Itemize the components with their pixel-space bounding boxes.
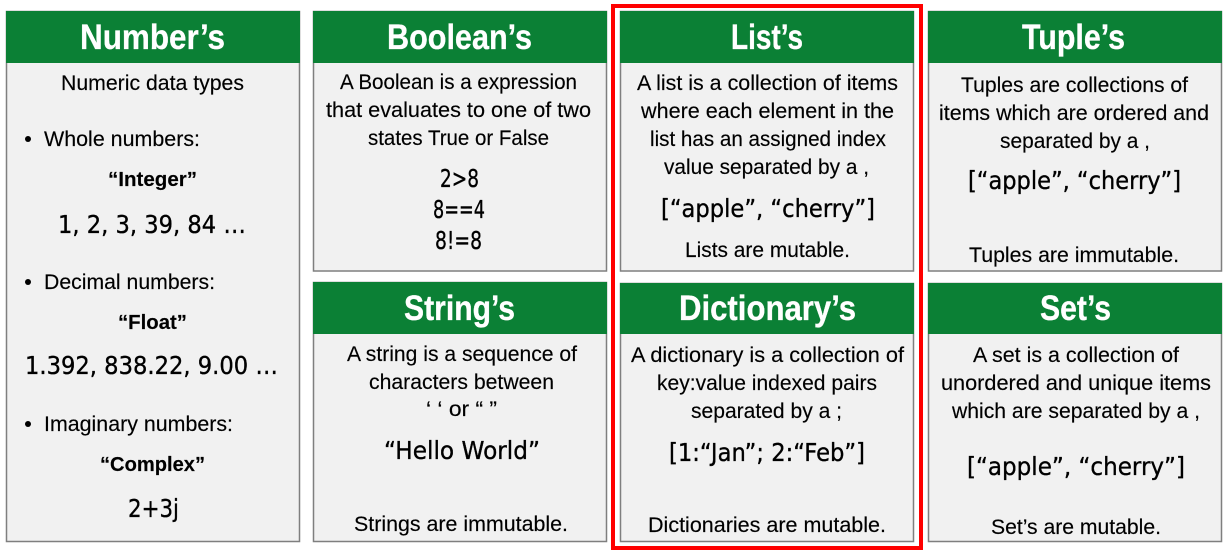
examples: boolean expressions: 8!=8 [435, 226, 482, 255]
panel: Tuples [928, 11, 1222, 271]
panel: Sets [928, 283, 1222, 542]
heading: Lists: List’s [731, 18, 803, 57]
examples: boolean expressions: 2>8 [440, 164, 479, 193]
example: set: [“apple”, “cherry”] [967, 452, 1185, 481]
panel: Dictionaries [620, 283, 914, 542]
note: sets mutable: Set’s are mutable. [991, 516, 1161, 539]
examples: boolean expressions [433, 164, 485, 255]
text: string description [347, 343, 577, 421]
panel: Strings [313, 282, 607, 542]
label: float: “Float” [118, 312, 187, 334]
text: tuple description: items which are ordered and [939, 102, 1209, 125]
label: complex: “Complex” [100, 454, 205, 476]
text: boolean description [326, 71, 591, 150]
text: numeric data types: Numeric data types [61, 72, 244, 95]
text: set description [941, 344, 1211, 423]
panel: Booleans [313, 11, 607, 271]
bullet: imaginary numbers: Imaginary numbers: [44, 413, 233, 436]
text: tuple description: separated by a , [1000, 130, 1150, 153]
note: lists mutable: Lists are mutable. [685, 239, 850, 262]
heading: Tuples: Tuple’s [1022, 18, 1125, 57]
text: string description: characters between [369, 371, 554, 394]
example: complex: 2+3j [128, 494, 179, 523]
text: list description: where each element in the [640, 100, 894, 123]
note: dictionaries mutable: Dictionaries are mutable. [648, 514, 886, 537]
example: dictionary: [1:“Jan”; 2:“Feb”] [669, 438, 865, 467]
text: list description [637, 72, 898, 179]
example: tuple: [“apple”, “cherry”] [968, 166, 1181, 195]
bullet: decimal numbers: Decimal numbers: [44, 271, 215, 294]
label: integer: “Integer” [108, 169, 197, 191]
bullet: whole numbers: Whole numbers: [44, 128, 200, 151]
text: tuple description: Tuples are collections of [961, 74, 1188, 97]
text: boolean description: that evaluates to one of two [326, 99, 591, 122]
text: string description: A string is a sequence of [347, 343, 577, 366]
text: boolean description: states True or False [368, 127, 549, 150]
text: boolean description: A Boolean is a expression [340, 71, 577, 94]
heading: Booleans: Boolean’s [387, 18, 532, 57]
example: integers: 1, 2, 3, 39, 84 … [58, 210, 246, 239]
text: list description: value separated by a , [664, 156, 869, 179]
text: set description: which are separated by a , [951, 400, 1200, 423]
example: string: “Hello World” [384, 436, 540, 465]
text: dictionary description [631, 344, 904, 423]
heading: Strings: String’s [404, 289, 515, 328]
example: list: [“apple”, “cherry”] [661, 194, 875, 223]
text: set description: unordered and unique items [941, 372, 1211, 395]
text: dictionary description: key:value indexed pairs [657, 372, 877, 395]
text: list description: list has an assigned index [650, 128, 886, 151]
panel: Lists [620, 11, 914, 271]
heading: Sets: Set’s [1040, 289, 1111, 328]
example: floats: 1.392, 838.22, 9.00 … [25, 351, 278, 380]
text: string description: ‘ ‘ or “ ” [426, 398, 497, 421]
note: strings immutable: Strings are immutable. [354, 513, 568, 536]
text: set description: A set is a collection of [973, 344, 1179, 367]
text: list description: A list is a collection of items [637, 72, 898, 95]
highlight frame: lists and dictionaries [613, 6, 921, 548]
note: tuples immutable: Tuples are immutable. [969, 244, 1179, 267]
examples: boolean expressions: 8==4 [433, 195, 485, 224]
heading: Numbers: Number’s [80, 18, 225, 57]
text: tuple description [939, 74, 1209, 153]
text: dictionary description: separated by a ; [691, 400, 842, 423]
panel: Numbers [6, 11, 300, 542]
text: dictionary description: A dictionary is a collection of [631, 344, 904, 367]
heading: Dictionaries: Dictionary’s [679, 289, 856, 328]
